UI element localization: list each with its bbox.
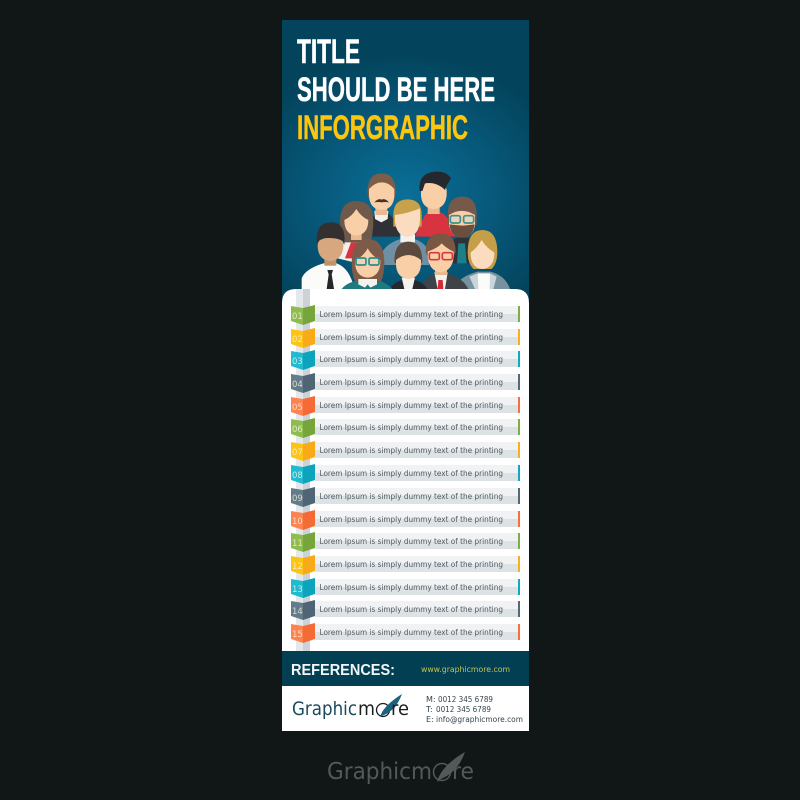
contact details: E: bbox=[426, 715, 434, 724]
person: blond woman bbox=[458, 230, 510, 289]
person: man with red glasses bbox=[420, 233, 468, 289]
row 14: 14 bbox=[292, 607, 303, 617]
row 08 bbox=[291, 464, 520, 484]
watermark logo: Graphicm bbox=[327, 759, 432, 785]
row 02: Lorem Ipsum is simply dummy text of the printing bbox=[320, 333, 503, 342]
row 07: 07 bbox=[292, 448, 303, 458]
row 04: Lorem Ipsum is simply dummy text of the printing bbox=[320, 378, 503, 387]
vertical column bbox=[296, 289, 310, 651]
row 11 bbox=[291, 532, 520, 552]
logo: Graphic bbox=[292, 698, 357, 720]
watermark logo bbox=[327, 752, 474, 785]
person: center man in dark suit bbox=[390, 242, 427, 289]
row 15 bbox=[291, 623, 520, 643]
watermark logo: re bbox=[452, 759, 474, 785]
row 15: 15 bbox=[292, 630, 303, 640]
person: bearded man with glasses bbox=[448, 197, 477, 263]
row 06 bbox=[291, 418, 520, 438]
logo: re bbox=[391, 698, 409, 720]
row 11: 11 bbox=[292, 539, 303, 549]
row 08: Lorem Ipsum is simply dummy text of the printing bbox=[320, 469, 503, 478]
row 05: 05 bbox=[292, 403, 303, 413]
contact details: T: bbox=[425, 705, 433, 714]
title: INFORGRAPHIC bbox=[297, 109, 468, 147]
logo: m bbox=[358, 698, 375, 720]
row 05: Lorem Ipsum is simply dummy text of the printing bbox=[320, 401, 503, 410]
row 02: 02 bbox=[292, 335, 303, 345]
row 09: Lorem Ipsum is simply dummy text of the printing bbox=[320, 492, 503, 501]
row 04 bbox=[291, 373, 520, 393]
logo bbox=[292, 694, 409, 720]
panel: contact footer bbox=[282, 686, 529, 731]
title bbox=[297, 33, 495, 147]
row 04: 04 bbox=[292, 380, 303, 390]
row 05 bbox=[291, 396, 520, 416]
person: black hair man in red sweater bbox=[415, 172, 456, 237]
contact details: info@graphicmore.com bbox=[436, 715, 523, 724]
row 08: 08 bbox=[292, 471, 303, 481]
row 03 bbox=[291, 350, 520, 370]
row 12: Lorem Ipsum is simply dummy text of the printing bbox=[320, 560, 503, 569]
references heading: REFERENCES: bbox=[291, 662, 395, 679]
person: man in white shirt bbox=[302, 222, 354, 289]
contact details: M: bbox=[426, 695, 436, 704]
person: blond man bbox=[382, 199, 429, 265]
row 01: Lorem Ipsum is simply dummy text of the printing bbox=[320, 310, 503, 319]
row 10: Lorem Ipsum is simply dummy text of the printing bbox=[320, 515, 503, 524]
row 14: Lorem Ipsum is simply dummy text of the printing bbox=[320, 605, 503, 614]
contact details: 0012 345 6789 bbox=[436, 705, 491, 714]
row 12: 12 bbox=[292, 562, 303, 572]
contact details: 0012 345 6789 bbox=[438, 695, 493, 704]
row 15: Lorem Ipsum is simply dummy text of the printing bbox=[320, 628, 503, 637]
row 07 bbox=[291, 441, 520, 461]
panel: header bbox=[282, 20, 529, 300]
panel: references band bbox=[282, 651, 529, 686]
row 06: 06 bbox=[292, 425, 303, 435]
row 09: 09 bbox=[292, 494, 303, 504]
row 10 bbox=[291, 510, 520, 530]
row 07: Lorem Ipsum is simply dummy text of the printing bbox=[320, 446, 503, 455]
contact details bbox=[425, 695, 523, 724]
panel: list background bbox=[282, 289, 529, 651]
row 11: Lorem Ipsum is simply dummy text of the printing bbox=[320, 537, 503, 546]
row 09 bbox=[291, 487, 520, 507]
row 02 bbox=[291, 328, 520, 348]
title: TITLE bbox=[297, 33, 360, 71]
row 03: 03 bbox=[292, 357, 303, 367]
row 13: Lorem Ipsum is simply dummy text of the printing bbox=[320, 583, 503, 592]
person: woman with teal glasses bbox=[342, 239, 392, 289]
row 06: Lorem Ipsum is simply dummy text of the printing bbox=[320, 423, 503, 432]
row 13 bbox=[291, 578, 520, 598]
person: mustache man bbox=[368, 173, 400, 237]
website: www.graphicmore.com bbox=[421, 665, 510, 674]
row 13: 13 bbox=[292, 585, 303, 595]
title: SHOULD BE HERE bbox=[297, 71, 495, 109]
row 10: 10 bbox=[292, 517, 303, 527]
row 14 bbox=[291, 600, 520, 620]
person: woman with brown hair bbox=[338, 201, 373, 265]
illustration: group of people bbox=[302, 172, 510, 289]
row 12 bbox=[291, 555, 520, 575]
row 03: Lorem Ipsum is simply dummy text of the printing bbox=[320, 355, 503, 364]
row 01: 01 bbox=[292, 312, 303, 322]
row 01 bbox=[291, 305, 520, 325]
